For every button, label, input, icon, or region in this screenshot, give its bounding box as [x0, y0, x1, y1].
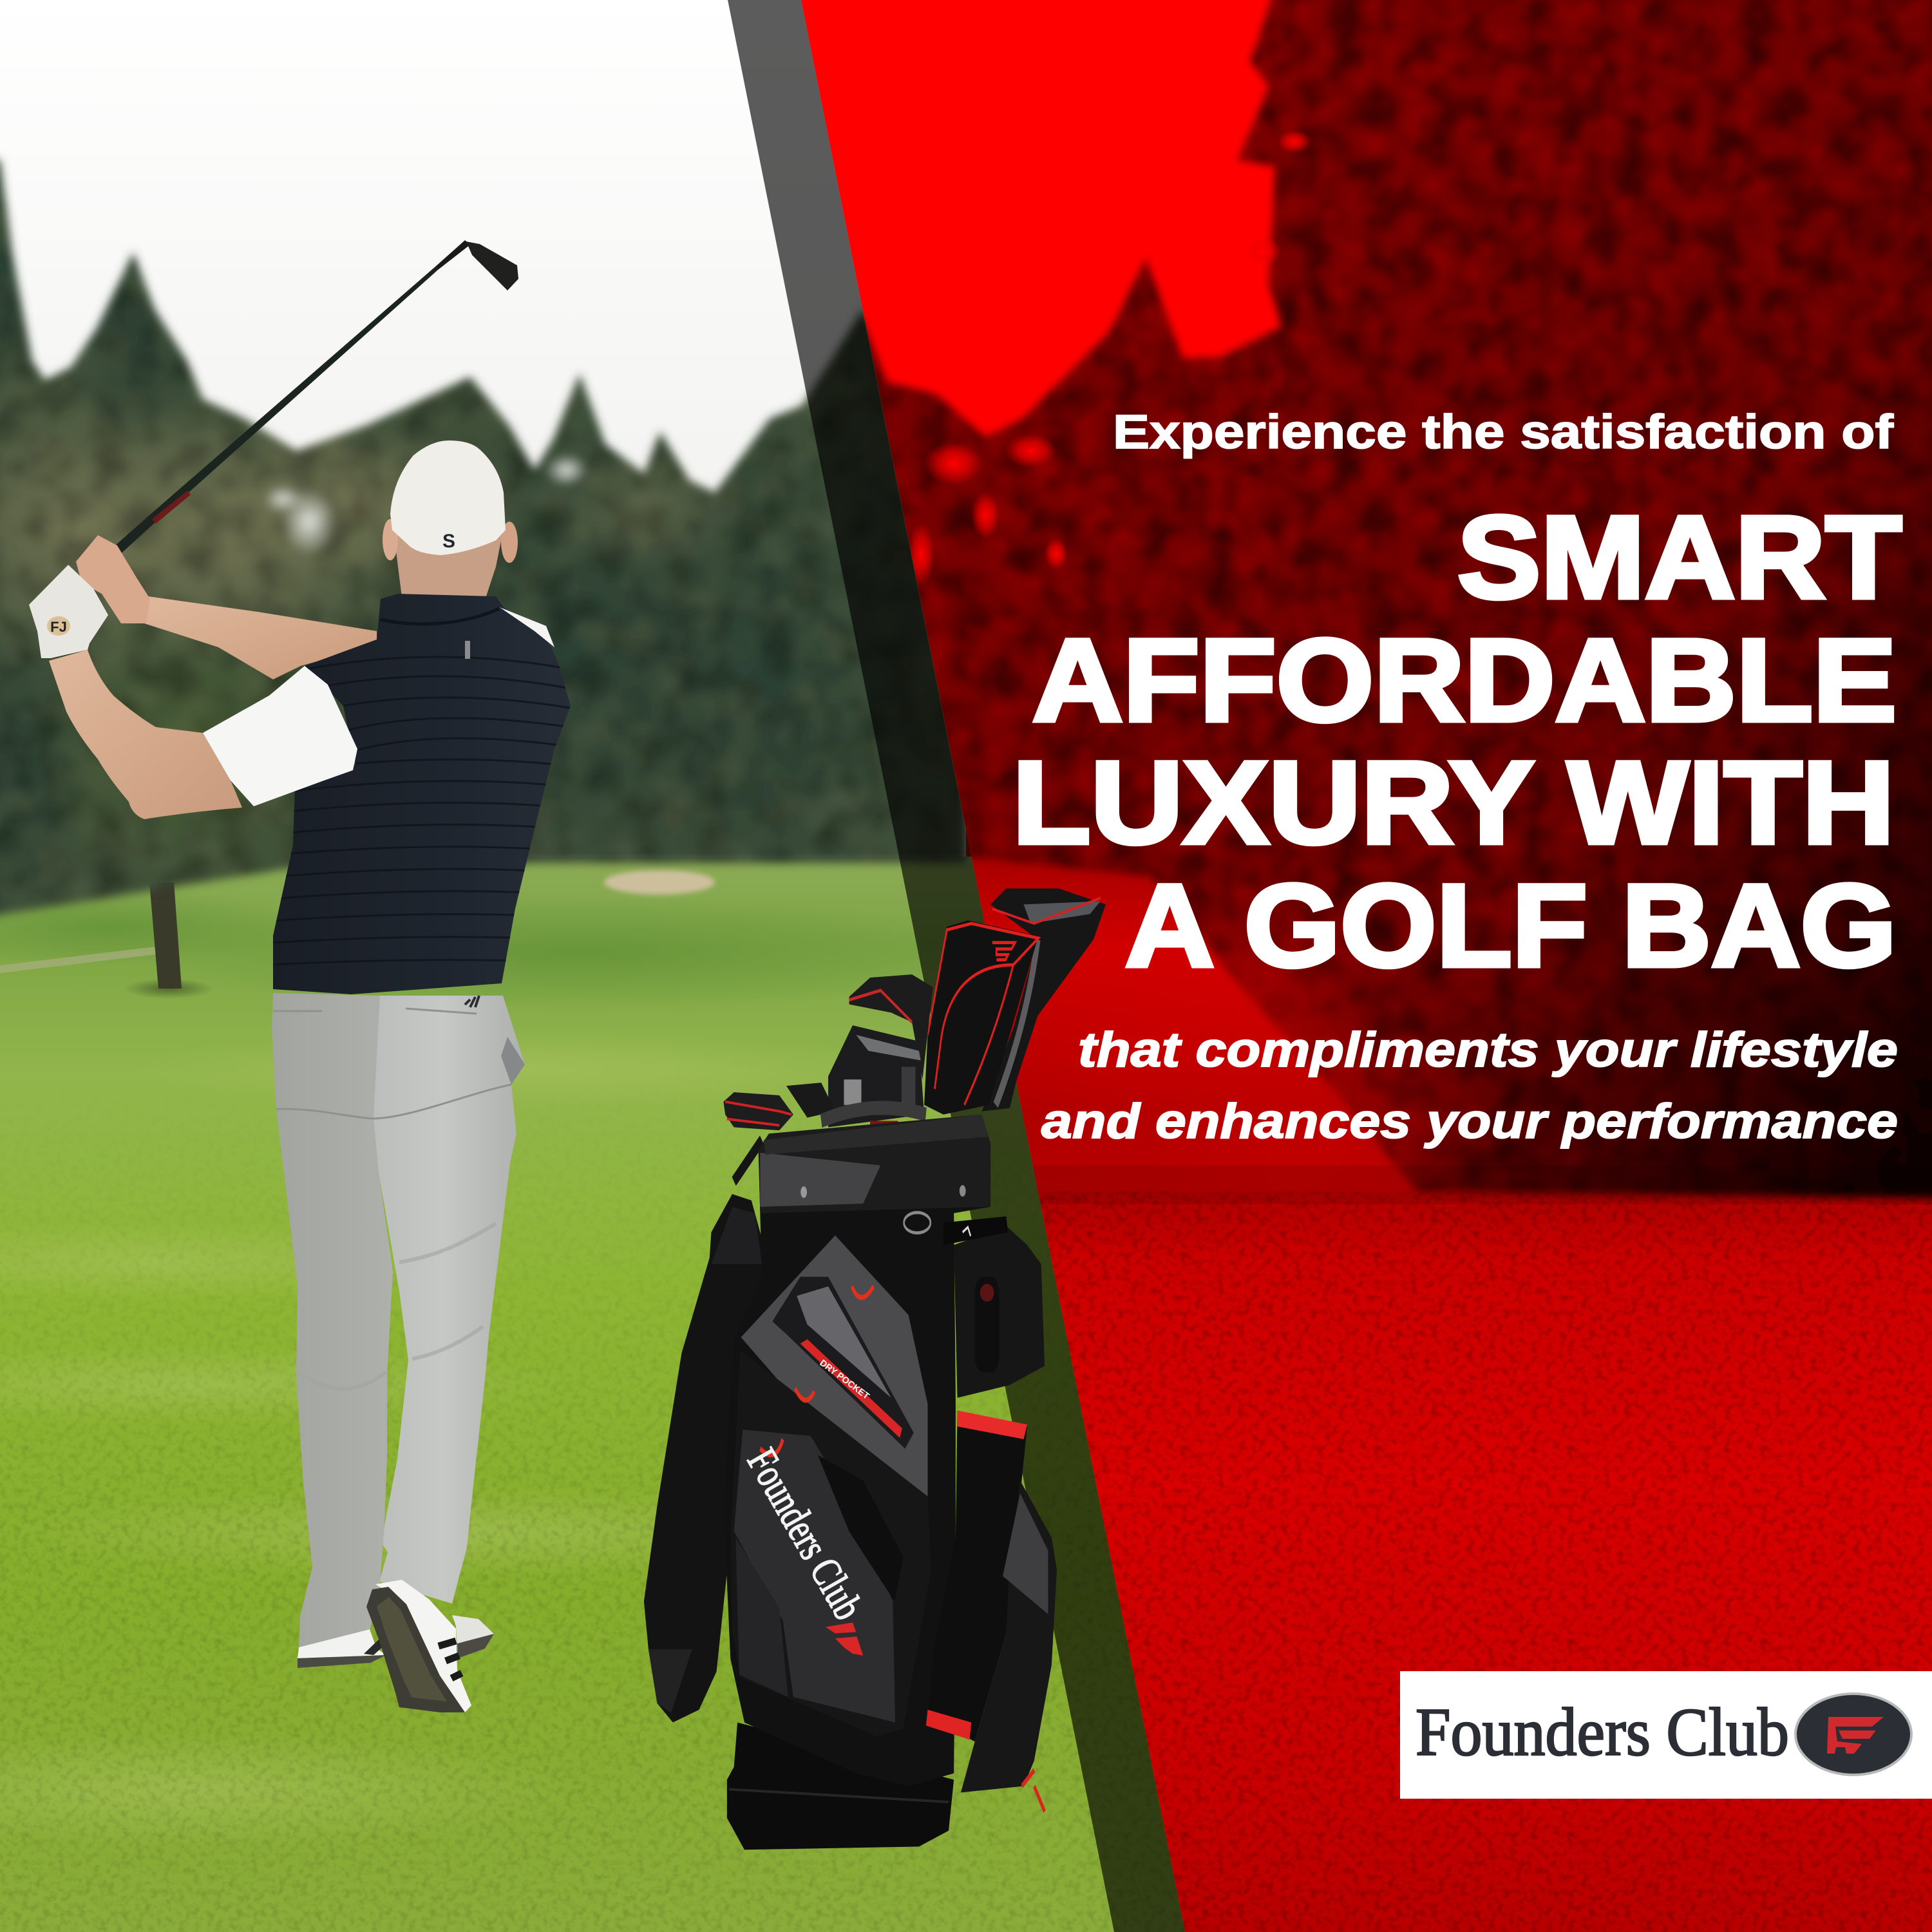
grey front panel [741, 1235, 928, 1497]
towel pocket [926, 1410, 1027, 1741]
sky [0, 0, 966, 902]
raised shoe [366, 1580, 471, 1712]
white cap [390, 440, 506, 555]
panel: right red duotone scene [801, 0, 1932, 1932]
right lower pocket [961, 1481, 1057, 1792]
bag base [727, 1723, 954, 1850]
white shirt shoulder [500, 607, 554, 647]
diagonal translucent band [728, 0, 1185, 1932]
bag logo mark [826, 1622, 863, 1656]
golf club [104, 240, 518, 563]
heading [1012, 491, 1902, 991]
dry pocket red zipper [800, 1340, 902, 1438]
near arm [49, 650, 242, 819]
fairway grass [0, 857, 1224, 1932]
gripping hand [76, 535, 150, 623]
lower front pocket [730, 1350, 931, 1736]
fairway wood headcover [849, 974, 933, 1079]
top grab handle [821, 1108, 926, 1121]
quilted vest [270, 594, 573, 994]
trousers [272, 993, 525, 1649]
golf glove [29, 565, 108, 658]
logo wordmark: Founders Club [1416, 1694, 1789, 1770]
italic tagline: that compliments your lifestyle [1078, 1023, 1898, 1077]
dry pocket recess [772, 1277, 914, 1449]
intro line: Experience the satisfaction of [1113, 405, 1893, 459]
standing shoe [298, 1615, 494, 1668]
far arm [144, 596, 377, 679]
logo emblem [1795, 1694, 1911, 1775]
dry pocket label: DRY POCKET [818, 1358, 872, 1401]
strap buckle [904, 1213, 1008, 1245]
cart path [0, 950, 161, 969]
logo panel [1400, 1671, 1932, 1799]
golf bag with clubs [644, 889, 1106, 1850]
brand mark on trousers [465, 996, 479, 1007]
zipper pulls [760, 1286, 873, 1455]
sand bunker [604, 870, 715, 895]
italic tagline: and enhances your performance [1041, 1094, 1898, 1149]
back headcover [982, 889, 1106, 1112]
heading: SMART [1457, 491, 1902, 623]
tree trunk [124, 882, 214, 999]
hybrid headcover [723, 1083, 835, 1130]
bag brand name: Founders Club [738, 1441, 872, 1627]
golf glove: FJ [50, 619, 67, 635]
shoulder strap [644, 1140, 764, 1723]
background tree line [0, 129, 979, 966]
iron clubs [828, 1025, 924, 1127]
main bag body [723, 1143, 990, 1786]
italic tagline [1041, 1023, 1898, 1149]
panel: left golf course photo scene [0, 0, 1224, 1932]
white cap: S [442, 531, 455, 552]
red zipper tags [1022, 1770, 1045, 1812]
heading: A GOLF BAG [1125, 860, 1897, 991]
golfer figure [29, 240, 573, 1712]
top collar [759, 1115, 990, 1213]
heading: LUXURY WITH [1012, 737, 1895, 868]
headline copy block [1012, 405, 1902, 1149]
driver headcover [924, 920, 1038, 1115]
head and neck [383, 519, 518, 602]
heading: AFFORDABLE [1032, 614, 1897, 746]
right upper pocket [954, 1226, 1045, 1397]
white shirt sleeve [203, 666, 357, 806]
